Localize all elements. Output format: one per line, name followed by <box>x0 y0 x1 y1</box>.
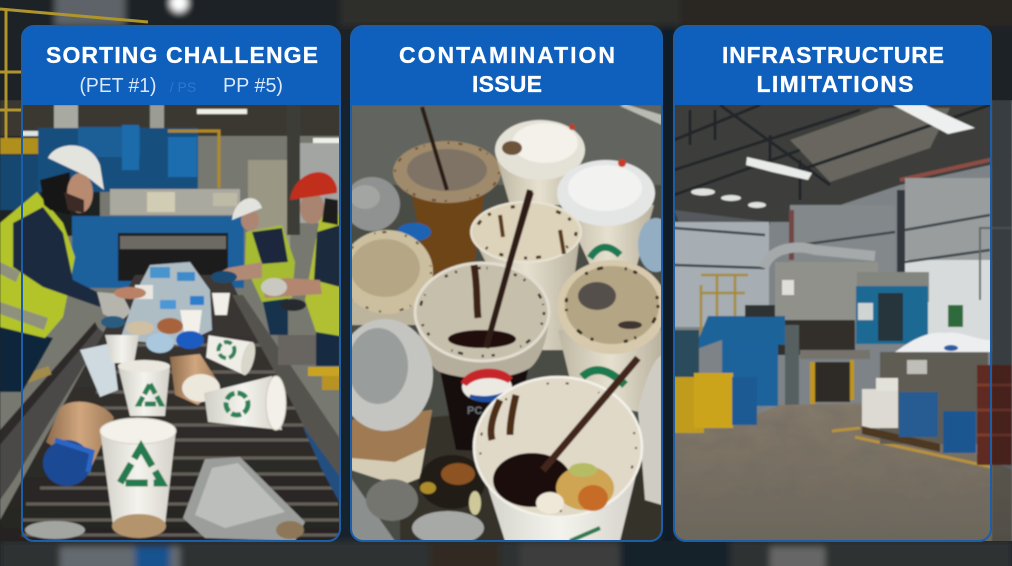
subheading: resin codes: (PET #1) <box>80 75 156 97</box>
clear plastic cup in foreground <box>183 457 305 541</box>
subheading: resin codes: / PS <box>170 79 196 95</box>
heading: sorting challenge: SORTING CHALLENGE <box>46 42 318 68</box>
copper-brown cup tipped over <box>170 354 220 405</box>
blue waste bin <box>732 377 757 425</box>
red metal shelving <box>977 365 1012 465</box>
blue-rimmed lid at right edge <box>638 217 661 273</box>
white lid cup with recycling mark <box>557 159 655 265</box>
crumpled plastic <box>366 479 418 521</box>
yellow waste bins <box>674 373 733 433</box>
debris at bottom left <box>25 521 85 539</box>
ceiling with trusses and skylights <box>674 100 1012 225</box>
front open cup with food <box>474 358 642 541</box>
contamination photo: dirty cups in a bin <box>352 105 661 540</box>
blue sorting machine <box>38 125 244 288</box>
subheading: resin codes: PP #5) <box>223 75 283 97</box>
pile of mixed cups <box>120 262 230 353</box>
heading: contamination issue: CONTAMINATION <box>399 42 615 68</box>
floor with yellow lane markings <box>674 403 1012 545</box>
heading: contamination issue: ISSUE <box>472 71 542 97</box>
top-left yellow safety railing <box>0 9 148 140</box>
blue crates <box>899 392 976 453</box>
stained lid cup at left <box>341 230 433 325</box>
pallet of white crates <box>862 378 940 452</box>
panel outline <box>674 26 991 541</box>
clear lid cup top left <box>344 177 400 231</box>
grey processing machine with duct <box>764 248 929 405</box>
heading: infrastructure limitations: LIMITATIONS <box>756 71 914 97</box>
large white cup with recycling symbol <box>100 418 176 538</box>
stacked cups at right edge <box>638 355 662 505</box>
standing cup with recycling symbol <box>118 360 170 416</box>
food debris <box>419 455 485 515</box>
blue hopper and yellow platform <box>674 275 785 406</box>
sorting header bar <box>22 26 340 105</box>
clear bottle on belt <box>80 343 118 397</box>
sideways white recycling cup <box>204 376 286 430</box>
big stained lid cup with recycling mark <box>557 260 667 412</box>
contamination header bar <box>351 26 662 105</box>
panel outline <box>22 26 340 541</box>
conveyor belt with rollers <box>0 275 341 545</box>
right worker in red helmet <box>261 172 340 366</box>
tilted recycling cup at back <box>204 334 256 376</box>
stained open cup with straw <box>471 192 581 350</box>
middle worker in white helmet <box>211 198 295 335</box>
partial Pepsi wordmark: PC <box>467 405 482 417</box>
infrastructure header bar <box>674 26 991 105</box>
sorting photo: workers at the conveyor <box>0 100 341 545</box>
grey storage container with white bags <box>880 332 991 444</box>
left worker in white helmet and hi-vis vest <box>0 145 146 392</box>
panel outline <box>351 26 662 541</box>
dimming over the photo edge outside the panel <box>992 100 1012 545</box>
icon: recycling symbol <box>120 447 162 483</box>
clear lid at bottom <box>412 511 484 545</box>
central open cup with Pepsi logo <box>415 190 549 452</box>
heading: infrastructure limitations: INFRASTRUCTURE <box>722 42 944 68</box>
blue control cabinet <box>856 286 928 344</box>
white cup behind <box>105 335 139 363</box>
icon: Pepsi-style globe <box>462 372 512 402</box>
tan cup with blue base <box>43 402 114 486</box>
panel: sorting challenge <box>0 9 341 545</box>
corrugated side walls <box>674 100 1012 365</box>
blue tab <box>397 223 431 241</box>
panel: infrastructure limitations <box>674 26 1012 545</box>
clear-lid latte cup <box>352 318 434 484</box>
metal bin corner <box>351 478 395 541</box>
white lid coffee cup <box>495 120 585 205</box>
panel: contamination issue <box>337 26 674 545</box>
infrastructure photo: sparse recycling plant <box>674 100 1012 545</box>
brown iced drink cup with straw <box>393 107 501 280</box>
